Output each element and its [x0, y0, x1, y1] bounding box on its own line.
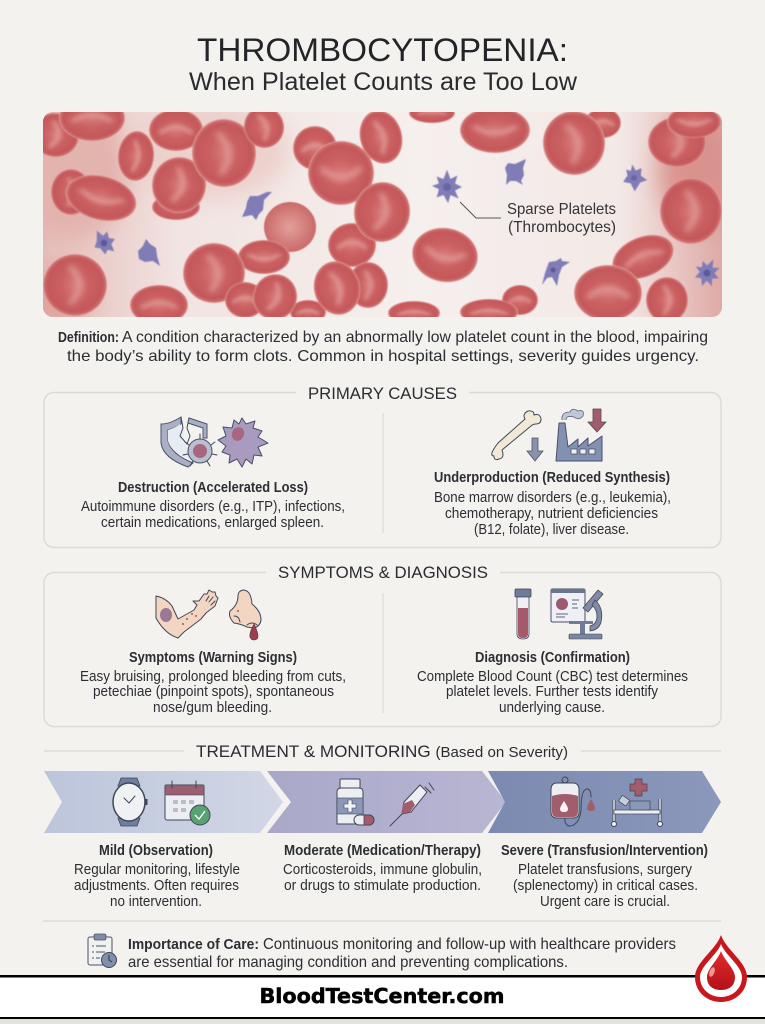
importance of care note: Continuous monitoring and follow-up with healthcare providers	[263, 936, 676, 953]
text: diagnosis: Complete Blood Count (CBC) test determines	[417, 668, 688, 685]
text: diagnosis: platelet levels. Further tests identify	[446, 683, 658, 700]
text: moderate: or drugs to stimulate production.	[284, 877, 481, 894]
text: symptoms: Easy bruising, prolonged bleeding from cuts,	[80, 668, 346, 685]
panel: symptoms and diagnosis	[44, 562, 721, 726]
callout: sparse platelets	[460, 201, 616, 236]
icon: blood bag and hospital bed	[551, 777, 662, 826]
text: mild: Regular monitoring, lifestyle	[74, 861, 240, 878]
importance of care note: Importance of Care:	[128, 937, 259, 953]
text: diagnosis	[417, 650, 688, 716]
text: destruction: certain medications, enlarged spleen.	[101, 514, 324, 531]
treatment: severe	[488, 771, 721, 833]
definition text	[58, 329, 708, 365]
icon: bruised arm and nosebleed	[156, 590, 261, 640]
callout: sparse platelets: (Thrombocytes)	[508, 219, 616, 236]
text: symptoms: nose/gum bleeding.	[153, 699, 272, 716]
icon: clipboard with clock	[88, 934, 116, 968]
text: destruction: Destruction (Accelerated Loss)	[118, 480, 308, 496]
text: underproduction	[434, 470, 671, 538]
text: symptoms	[80, 650, 346, 716]
title	[189, 32, 578, 96]
icon: bone and factory with down arrows	[492, 409, 606, 461]
text: severe	[501, 843, 708, 910]
platelets	[88, 159, 725, 291]
heading: primary causes: PRIMARY CAUSES	[308, 384, 457, 403]
text: underproduction: (B12, folate), liver disease.	[474, 521, 629, 538]
footer band	[0, 975, 765, 1024]
panel: primary causes	[44, 383, 721, 548]
text: destruction: Autoimmune disorders (e.g., ITP), infections,	[81, 498, 345, 515]
icon: pill bottle and syringe	[337, 779, 434, 826]
text: diagnosis: Diagnosis (Confirmation)	[475, 650, 630, 666]
heading: symptoms and diagnosis: SYMPTOMS & DIAGNOSIS	[278, 563, 488, 582]
importance of care note	[88, 934, 676, 971]
text: severe: (splenectomy) in critical cases.	[513, 877, 698, 894]
text: underproduction: Bone marrow disorders (e.g., leukemia),	[434, 489, 671, 506]
footer band: BloodTestCenter.com	[260, 984, 504, 1008]
text: destruction	[81, 480, 345, 531]
definition text: A condition characterized by an abnormally low platelet count in the blood, impairing	[122, 329, 708, 346]
text: moderate	[283, 843, 482, 894]
text: mild	[74, 843, 240, 910]
treatment: mild	[44, 771, 283, 833]
text: mild: adjustments. Often requires	[74, 877, 239, 894]
heading: treatment and monitoring: TREATMENT & MONITORING (Based on Severity)	[196, 742, 568, 761]
importance of care note: are essential for managing condition and preventing complications.	[128, 954, 568, 971]
definition text: the body’s ability to form clots. Common in hospital settings, severity guides urgency.	[67, 348, 699, 365]
title: THROMBOCYTOPENIA:	[197, 32, 568, 68]
text: moderate: Corticosteroids, immune globulin,	[283, 861, 482, 878]
icon: blood drop logo	[695, 935, 747, 1002]
text: severe: Platelet transfusions, surgery	[518, 861, 692, 878]
icon: watch and calendar	[113, 778, 210, 826]
text: mild: Mild (Observation)	[99, 843, 213, 859]
definition text: Definition:	[58, 329, 119, 346]
callout: sparse platelets: Sparse Platelets	[507, 201, 616, 218]
text: severe: Urgent care is crucial.	[540, 893, 670, 910]
text: underproduction: Underproduction (Reduced Synthesis)	[434, 470, 670, 486]
text: diagnosis: underlying cause.	[499, 699, 605, 716]
icon: broken shield and damaged platelet	[161, 417, 268, 467]
text: symptoms: petechiae (pinpoint spots), spontaneous	[93, 683, 334, 700]
text: symptoms: Symptoms (Warning Signs)	[129, 650, 297, 666]
icon: blood tube and microscope	[515, 589, 603, 639]
text: underproduction: chemotherapy, nutrient deficiencies	[445, 505, 658, 522]
text: moderate: Moderate (Medication/Therapy)	[284, 843, 481, 859]
text: mild: no intervention.	[110, 893, 202, 910]
title: When Platelet Counts are Too Low	[189, 68, 578, 96]
hero image: blood cells with sparse platelets	[43, 112, 722, 317]
treatment: moderate	[267, 771, 506, 833]
text: severe: Severe (Transfusion/Intervention)	[501, 843, 708, 859]
